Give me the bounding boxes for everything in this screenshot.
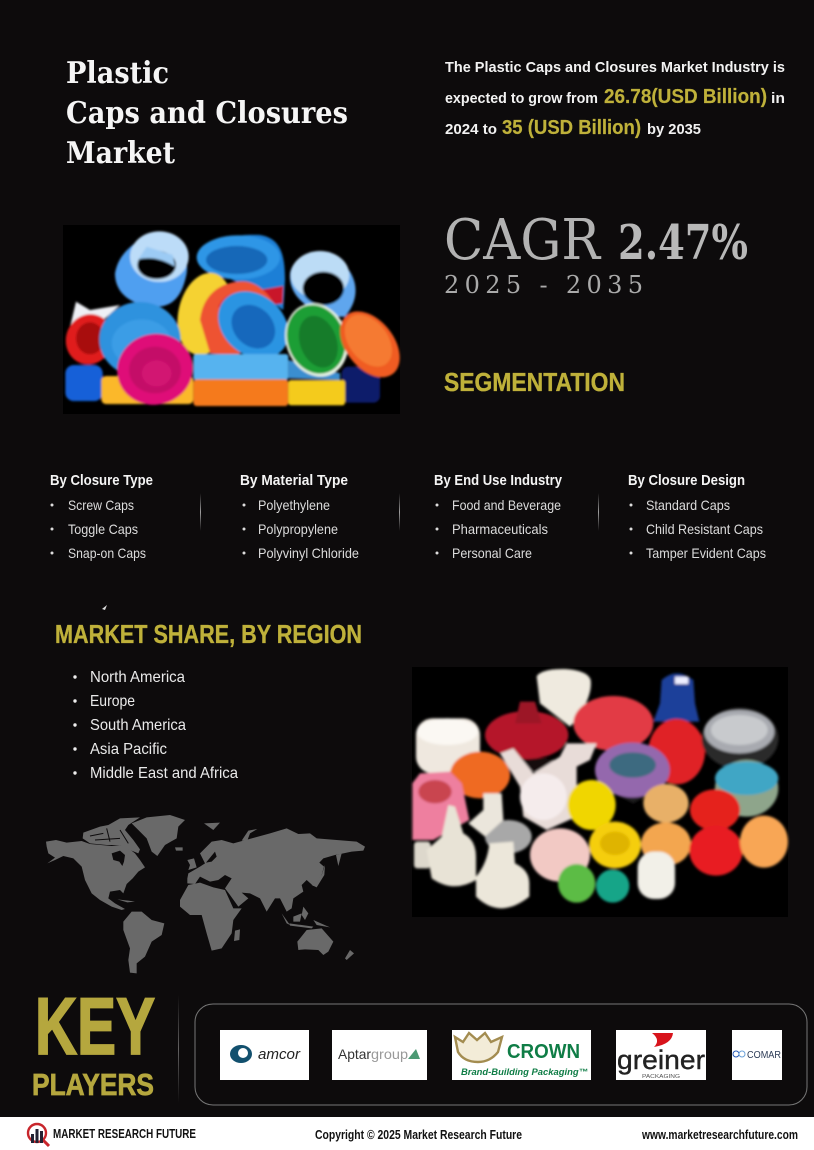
segmentation column: material type — [240, 472, 359, 561]
footer bar: Copyright © 2025 Market Research Future — [315, 1128, 522, 1142]
logo: greiner: PACKAGING — [642, 1074, 680, 1080]
cap: white and red left — [59, 302, 120, 401]
image: assorted dispensing closures — [412, 667, 788, 917]
market forecast text: 35 (USD Billion) — [502, 117, 641, 139]
title — [66, 56, 348, 171]
market forecast text: in — [771, 90, 785, 107]
cap: blue stacked top — [197, 235, 285, 310]
market forecast text: 26.78(USD Billion) — [604, 86, 767, 108]
logo: crown — [452, 1030, 591, 1080]
segmentation column: closure type: Screw Caps — [68, 497, 134, 513]
title: Plastic — [66, 56, 169, 91]
segmentation column: material type: Polyethylene — [258, 497, 330, 513]
segmentation column: material type: Polypropylene — [258, 521, 338, 537]
logo: comar — [732, 1030, 782, 1080]
title: Caps and Closures — [66, 96, 348, 131]
footer logo — [28, 1124, 49, 1146]
segmentation column: closure design: Standard Caps — [646, 497, 730, 513]
key players panel — [195, 1004, 807, 1105]
segmentation column: closure type: Toggle Caps — [68, 521, 138, 537]
closure: red cup — [648, 719, 705, 784]
market forecast text: 2024 to — [445, 121, 497, 138]
closure: purple — [595, 743, 670, 803]
closure: white jar — [416, 718, 480, 773]
closure: red round — [573, 696, 653, 751]
closure: translucent pump — [500, 743, 597, 830]
footer bar — [0, 1117, 814, 1150]
region list: Europe — [90, 693, 135, 710]
region list: South America — [90, 717, 186, 734]
key players heading: PLAYERS — [32, 1067, 154, 1102]
segmentation column: end use industry: Personal Care — [452, 545, 532, 561]
logo: greiner: greiner — [617, 1045, 705, 1075]
logo: amcor: amcor — [258, 1046, 301, 1063]
cap: green — [275, 294, 358, 386]
cap: bright blue tilted — [205, 277, 302, 373]
closure: yellow flip — [568, 780, 641, 868]
closure: clear and dark — [702, 708, 778, 769]
world map — [46, 815, 365, 973]
region list: Middle East and Africa — [90, 765, 238, 782]
segmentation column: end use industry — [434, 472, 563, 561]
segmentation column: end use industry: Pharmaceuticals — [452, 521, 548, 537]
caps: bottom stack — [193, 354, 380, 406]
CAGR: 2025 - 2035 — [444, 271, 643, 299]
closure: red flip — [689, 789, 743, 876]
closure: peach round — [740, 816, 788, 868]
logo: crown: Brand-Building Packaging™ — [461, 1067, 588, 1077]
cap: magenta — [109, 325, 201, 413]
segmentation column: closure type: Snap-on Caps — [68, 545, 146, 561]
CAGR: CAGR — [444, 208, 602, 273]
closure: striped cap — [715, 760, 778, 817]
cap: orange ribbed — [200, 281, 278, 357]
market forecast text — [445, 59, 785, 139]
logo: comar: COMAR — [747, 1050, 781, 1061]
segmentation column: closure design: Tamper Evident Caps — [646, 545, 766, 561]
cap: orange right — [328, 300, 412, 389]
segmentation column: closure design — [628, 472, 766, 561]
logo: greiner — [616, 1030, 706, 1080]
image: colourful plastic bottle caps — [59, 225, 412, 414]
segmentation column: end use industry: Food and Beverage — [452, 497, 561, 513]
key players heading — [32, 982, 155, 1102]
closure: peach flip — [641, 784, 691, 866]
region list: North America — [90, 669, 185, 686]
cap: blue large — [99, 302, 193, 404]
segmentation column: closure design: By Closure Design — [628, 472, 745, 489]
logo: aptargroup: Aptar — [338, 1046, 371, 1062]
logo: crown: CROWN — [507, 1041, 580, 1063]
map: Americas and Greenland — [46, 815, 185, 973]
closure: pink translucent — [530, 828, 590, 882]
cap: light blue threaded ring left — [115, 231, 189, 307]
segmentation column: closure design: Child Resistant Caps — [646, 521, 763, 537]
market forecast text: by 2035 — [647, 121, 701, 138]
closure: white small — [638, 852, 675, 899]
map: Europe, Africa, Asia and Oceania — [180, 823, 365, 960]
closure: grey — [485, 820, 532, 853]
market forecast text: The Plastic Caps and Closures Market Industry is — [445, 59, 785, 76]
title: Market — [66, 136, 175, 171]
closure: orange — [450, 752, 510, 798]
logo: aptargroup — [332, 1030, 427, 1080]
segmentation column: closure type — [50, 472, 153, 561]
key players heading: KEY — [35, 982, 155, 1072]
cap: light blue ring right — [290, 251, 356, 317]
segmentation column: end use industry: By End Use Industry — [434, 472, 563, 489]
closure: green nozzles — [558, 864, 629, 903]
closure: blue nozzle — [653, 673, 699, 722]
segmentation column: material type: By Material Type — [240, 472, 348, 489]
heading: segmentation: SEGMENTATION — [444, 367, 625, 397]
region list — [73, 669, 238, 782]
closure: white spouts — [414, 793, 529, 908]
footer bar: MARKET RESEARCH FUTURE — [53, 1127, 196, 1141]
heading: market share by region: MARKET SHARE, BY REGION — [55, 619, 362, 649]
logo: amcor — [220, 1030, 309, 1080]
CAGR — [444, 208, 748, 299]
segmentation column: closure type: By Closure Type — [50, 472, 153, 489]
closure: dark red spout — [485, 702, 568, 773]
segmentation column: material type: Polyvinyl Chloride — [258, 545, 359, 561]
region list: Asia Pacific — [90, 741, 167, 758]
market forecast text: expected to grow from — [445, 90, 598, 107]
closure: pink flip — [412, 772, 469, 840]
logo: aptargroup: group — [371, 1046, 408, 1062]
cap: yellow — [170, 268, 240, 360]
closure: white top — [537, 669, 591, 727]
CAGR: 2.47% — [618, 215, 748, 271]
